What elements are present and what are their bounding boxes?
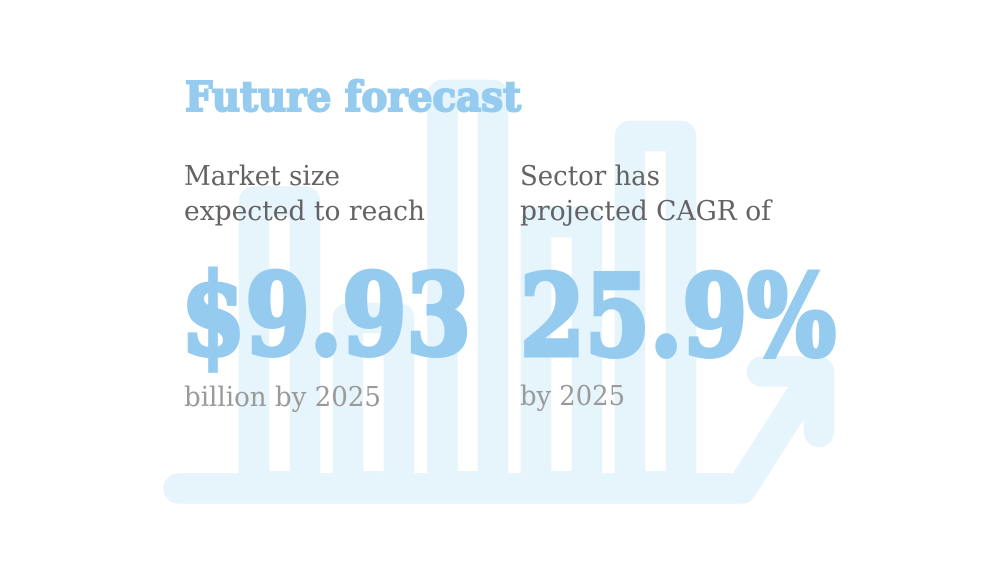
background chart: bars with rising arrow — [178, 95, 819, 488]
right intro text: projected CAGR of — [520, 196, 773, 227]
left intro text: expected to reach — [184, 196, 425, 227]
title: Future forecast — [185, 73, 521, 121]
right caption: by 2025 — [520, 381, 625, 412]
right intro text: Sector has — [520, 161, 660, 192]
right big number: 25.9% — [520, 252, 836, 382]
left big number: $9.93 — [181, 251, 471, 381]
left intro text: Market size — [184, 161, 340, 192]
right intro text — [520, 161, 773, 227]
left caption: billion by 2025 — [184, 382, 381, 413]
left intro text — [184, 161, 425, 227]
